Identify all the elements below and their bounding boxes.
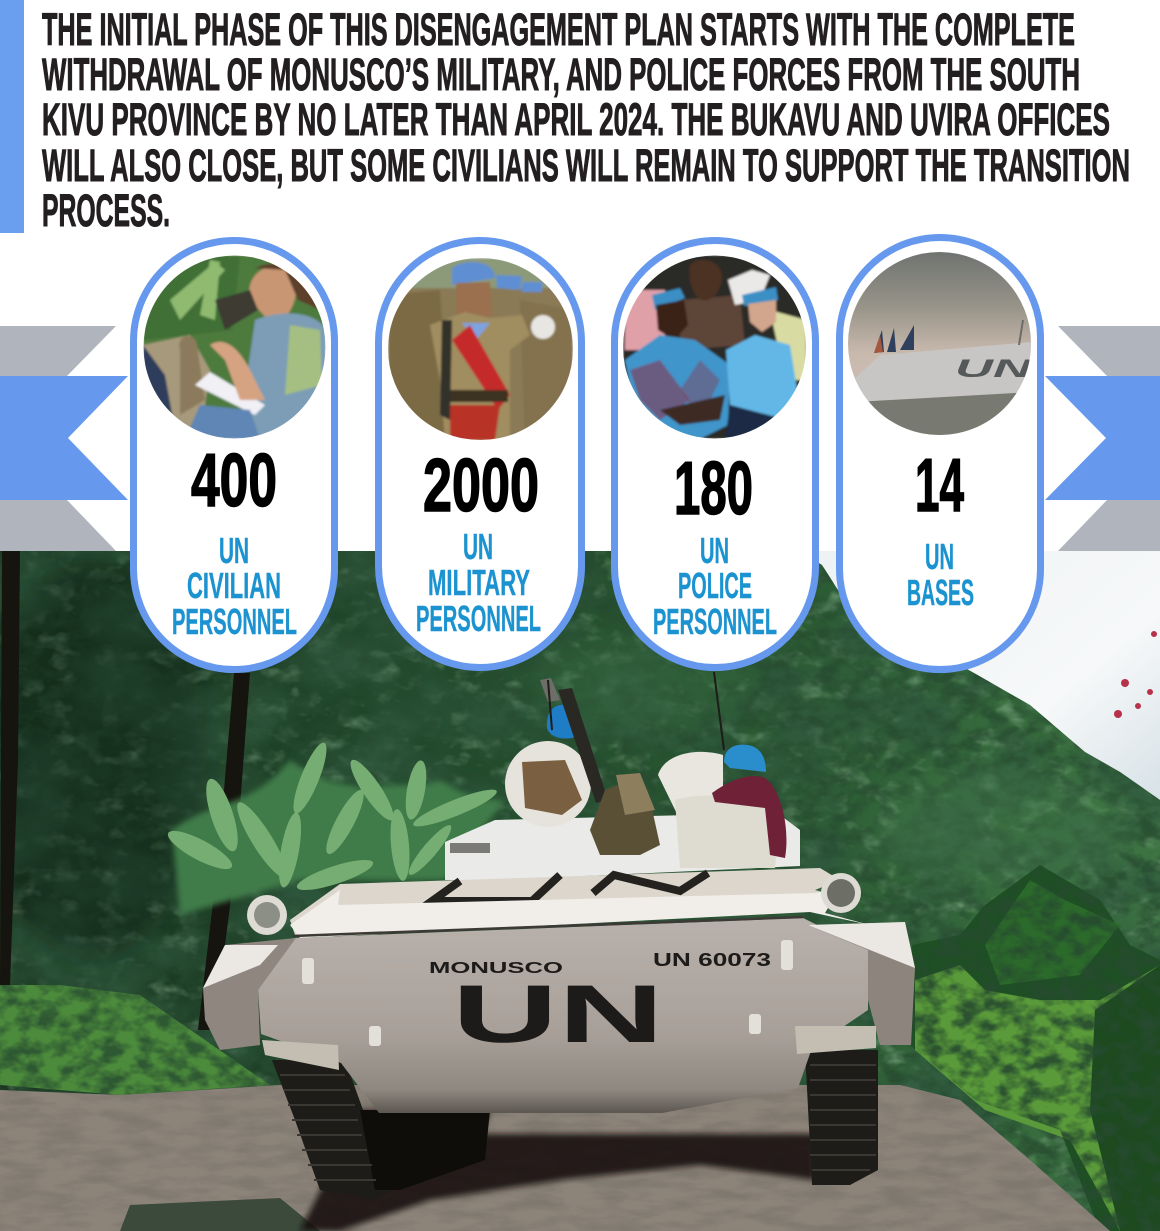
pill outline (840, 238, 1040, 670)
puddle (120, 1198, 320, 1231)
number: 180 (674, 446, 753, 530)
ribbon left (0, 326, 128, 551)
label: PERSONNEL (172, 601, 297, 642)
background photo: UN armoured vehicle on jungle road (0, 551, 1160, 1231)
sky (800, 551, 1160, 851)
accent bar (0, 0, 24, 233)
ribbon right (1045, 326, 1160, 551)
front lip (290, 888, 870, 938)
hull markings: MONUSCO (429, 960, 563, 977)
headlights (247, 873, 861, 935)
label: CIVILIAN (187, 565, 281, 606)
pill outline (614, 240, 816, 668)
left fender (203, 938, 296, 1050)
heading paragraph: PROCESS. (42, 185, 170, 236)
tracks (272, 1050, 878, 1200)
label: UN (219, 530, 249, 571)
panel: civilian personnel (134, 240, 334, 670)
number: 14 (915, 443, 964, 527)
banana plants (164, 739, 505, 915)
label (172, 530, 297, 642)
label: MILITARY (428, 562, 530, 603)
hull markings (429, 950, 771, 1060)
hull markings: UN 60073 (653, 950, 771, 970)
label: UN (463, 526, 493, 567)
panel: UN bases (840, 238, 1040, 670)
panel: police personnel (614, 240, 816, 668)
pill outline (378, 240, 582, 668)
right fender (808, 922, 915, 1045)
photo: UN base building with flags: UN (955, 355, 1033, 383)
label: BASES (907, 572, 974, 613)
dirt road (0, 1085, 1160, 1231)
pill outline (134, 240, 334, 670)
vehicle shadow (300, 1110, 815, 1231)
tree trunks (0, 551, 250, 1030)
panel: military personnel (378, 240, 582, 668)
grass verge left (0, 985, 280, 1100)
glacis deck (290, 868, 850, 935)
number: 2000 (423, 443, 539, 527)
bushes right (905, 860, 1160, 1231)
number: 400 (191, 438, 277, 522)
label: PERSONNEL (653, 601, 777, 642)
label: PERSONNEL (416, 598, 541, 639)
label (653, 530, 777, 642)
label (416, 526, 541, 639)
photo: civilian officer with group (143, 255, 326, 439)
photo: peacekeepers in parade uniform (388, 258, 573, 441)
photo: UN base building with flags (848, 252, 1033, 436)
red flowers (1114, 631, 1157, 718)
hillside forest (0, 551, 1160, 1231)
white header band (0, 0, 1160, 551)
hull front plate (258, 918, 868, 1113)
turret and crew (445, 672, 800, 880)
label (907, 536, 974, 613)
heading paragraph (42, 4, 1130, 236)
deck UN lettering (432, 873, 708, 901)
hull tow hooks (302, 940, 793, 1046)
label: UN (925, 536, 954, 577)
mud flaps (262, 1040, 339, 1070)
label: POLICE (678, 565, 752, 606)
photo: UN police officers (623, 255, 807, 439)
label: UN (700, 530, 729, 571)
hull markings: UN (452, 969, 664, 1060)
